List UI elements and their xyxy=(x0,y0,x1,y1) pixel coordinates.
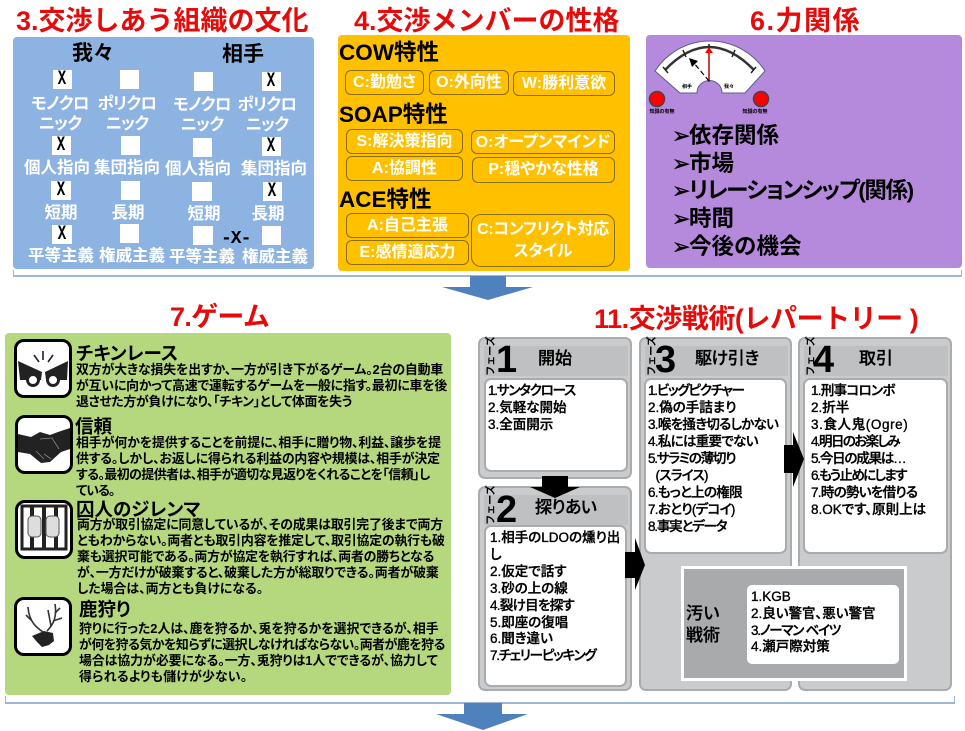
list: 5.今日の成果は… xyxy=(811,451,905,466)
row 4 checkboxes and labels: -X- xyxy=(221,229,250,249)
gauge: power meter: 相手 xyxy=(682,83,692,90)
pills: ACE: E:感情適応力 xyxy=(359,244,456,261)
row 2 checkboxes and labels xyxy=(24,134,307,178)
list: 3.砂の上の線 xyxy=(490,581,568,596)
list: power factors xyxy=(672,123,913,260)
list: dirty tactics: 2.良い警官、悪い警官 xyxy=(751,606,876,621)
panel: phase 2 probing xyxy=(478,486,632,691)
list: dirty tactics: 1.KGB xyxy=(751,589,791,604)
row 2 checkboxes and labels: 個人指向 xyxy=(165,160,231,178)
phase title: 取引 xyxy=(859,349,893,368)
list: dirty tactics xyxy=(747,585,899,664)
list: 6.もう止めにします xyxy=(811,468,906,483)
heading: ACE traits: ACE特性 xyxy=(339,187,432,212)
list xyxy=(644,378,787,554)
list: 8.事実とデータ xyxy=(648,519,726,534)
text: trust: 供する。しかし、お返しに得られる利益の内容や規模は、相手が決定 xyxy=(76,451,440,466)
row 4 checkboxes and labels: 権威主義 xyxy=(242,248,308,266)
row 2 checkboxes and labels: 集団指向 xyxy=(94,159,160,177)
text: prisoner's dilemma: 両方が取引協定に同意しているが、その成果は取引完了後まで両方 xyxy=(77,517,443,532)
pills: COW: O:外向性 xyxy=(436,74,502,91)
list: 1.ビッグピクチャー xyxy=(648,383,744,398)
heading: counterpart: 相手 xyxy=(222,43,264,66)
phase number: 4 xyxy=(813,339,834,381)
list: 3.全面開示 xyxy=(488,417,553,432)
title: 6 power relations: 6.力関係 xyxy=(750,6,861,36)
heading: dirty tactics: 汚い xyxy=(686,604,720,623)
panel: phase 1 opening xyxy=(478,337,632,479)
list: 2.気軽な開始 xyxy=(488,400,567,415)
row 4 checkboxes and labels: X xyxy=(58,223,66,246)
panel: phase 4 closing xyxy=(798,337,952,691)
text: trust xyxy=(76,435,441,498)
phase label: フェーズ xyxy=(647,336,658,376)
list: 4.私には重要でない xyxy=(648,434,758,449)
pills: COW: C:勤勉さ xyxy=(353,74,416,91)
panel: games xyxy=(5,333,451,695)
list xyxy=(803,378,948,554)
list: power factors: 市場 xyxy=(689,151,734,176)
heading: stag hunt: 鹿狩り xyxy=(79,599,131,620)
list: power factors: ➢ xyxy=(672,124,690,149)
list xyxy=(484,378,628,472)
icon: prison bars xyxy=(15,500,73,559)
gauge: power meter: 我々 xyxy=(724,83,734,90)
text: prisoner's dilemma: ともわからない。両者とも取引内容を推定して、取引協定の執行も破 xyxy=(77,533,445,548)
row 3 checkboxes and labels: 短期 xyxy=(188,205,220,223)
row 2 checkboxes and labels: X xyxy=(267,135,276,158)
header band xyxy=(804,346,948,376)
row 1 checkboxes and labels: ニック xyxy=(246,116,288,134)
arrow: down top row xyxy=(442,276,533,300)
row 1 checkboxes and labels: ニック xyxy=(106,115,148,133)
phase title: 探りあい xyxy=(535,498,596,517)
row 2 checkboxes and labels: X xyxy=(57,134,66,157)
list: 8.OKです、原則上は xyxy=(811,502,926,517)
list: dirty tactics: 3.ノーマン ベイツ xyxy=(751,623,840,638)
panel: organizational culture xyxy=(13,37,314,269)
pills: ACE: A:自己主張 xyxy=(367,217,448,234)
list: 1.刑事コロンボ xyxy=(811,383,895,398)
row 1 checkboxes and labels: ポリクロ xyxy=(237,96,297,114)
icon: handshake xyxy=(15,415,73,474)
title: 11 negotiation tactics: 11.交渉戦術(レパートリー ) xyxy=(594,304,918,334)
phase number: 3 xyxy=(655,339,676,381)
list: 7.チェリーピッキング xyxy=(490,648,595,663)
panel: power relations xyxy=(646,35,962,268)
list: 6.もっと上の権限 xyxy=(648,485,742,500)
arrow: phase 3 to 4 xyxy=(784,432,804,487)
row 2 checkboxes and labels: 個人指向 xyxy=(24,159,90,177)
list: dirty tactics: 4.瀬戸際対策 xyxy=(751,639,830,654)
pills: SOAP: S:解決策指向 xyxy=(356,133,452,150)
text: stag hunt: 場合は協力が必要になる。一方、兎狩りは1人でできるが、協力して xyxy=(79,653,438,668)
title: 7 game: 7.ゲーム xyxy=(170,302,269,332)
panel: member personality xyxy=(338,35,630,271)
list: 1.サンタクロース xyxy=(488,383,575,398)
list: 3.食人鬼(Ogre) xyxy=(811,417,908,432)
row 1 checkboxes and labels: ポリクロ xyxy=(97,95,157,113)
heading: dirty tactics xyxy=(686,604,720,645)
list: 2.折半 xyxy=(811,400,849,415)
gauge: power meter xyxy=(648,40,770,115)
phase label: フェーズ xyxy=(806,336,817,376)
text: prisoner's dilemma: 棄も選択可能である。両方が協定を執行すれば、両者の勝ちとなる xyxy=(77,549,434,564)
list: 5.サラミの薄切り xyxy=(648,451,735,466)
pills: ACE: C:コンフリクト対応 xyxy=(477,221,609,238)
phase number: 1 xyxy=(496,339,517,381)
text: trust: する。最初の提供者は、相手が適切な見返りをくれることを「信頼」し xyxy=(76,467,430,482)
heading: COW traits: COW特性 xyxy=(339,40,439,65)
pills: SOAP: A:協調性 xyxy=(372,160,437,177)
panel: dirty tactics xyxy=(681,566,907,681)
list: 3.喉を掻き切るしかない xyxy=(648,417,778,432)
bracket line: top row xyxy=(13,270,962,277)
row 1 checkboxes and labels: X xyxy=(58,68,67,91)
list: 1.相手のLDOの燻り出 xyxy=(490,530,620,545)
text: chicken race: 退させた方が負けになり、「チキン」として体面を失う xyxy=(76,394,352,409)
header band xyxy=(484,495,628,525)
row 3 checkboxes and labels: X xyxy=(268,180,277,203)
header band xyxy=(645,346,788,376)
pills: SOAP xyxy=(346,129,615,183)
heading: chicken race: チキンレース xyxy=(76,343,178,364)
heading: prisoner's dilemma: 囚人のジレンマ xyxy=(76,499,201,520)
list: power factors: 時間 xyxy=(689,206,734,231)
list: power factors: ➢ xyxy=(672,235,690,260)
list: power factors: ➢ xyxy=(672,179,690,204)
heading: us: 我々 xyxy=(72,42,114,65)
text: chicken race: が互いに向かって高速で運転するゲームを一般に指す。最初に車を後 xyxy=(76,378,447,393)
list: 6.聞き違い xyxy=(490,631,553,646)
arrow: down bottom row xyxy=(436,703,528,730)
text: prisoner's dilemma xyxy=(77,517,445,596)
gauge: power meter: 知識の有無 xyxy=(649,108,675,115)
text: chicken race: 双方が大きな損失を出すか、一方が引き下がるゲーム。2台の自動車 xyxy=(76,362,443,377)
list: 5.即座の復唱 xyxy=(490,615,568,630)
pills: ACE: スタイル xyxy=(514,243,572,260)
gauge: power meter: 知識の有無 xyxy=(742,108,768,115)
title: 4 member personality: 4.交渉メンバーの性格 xyxy=(354,6,620,36)
list: 7.おとり(デコイ) xyxy=(648,502,735,517)
phase title: 駆け引き xyxy=(695,349,759,368)
list: power factors: リレーションシップ(関係) xyxy=(689,178,913,203)
text: stag hunt: が何を狩る気かを知らずに選択しなければならない。両者が鹿を狩る xyxy=(79,637,445,652)
row 3 checkboxes and labels xyxy=(44,179,284,223)
row 3 checkboxes and labels: 長期 xyxy=(252,205,284,223)
row 1 checkboxes and labels xyxy=(31,68,297,134)
list: 2.仮定で話す xyxy=(490,564,566,579)
row 4 checkboxes and labels: 権威主義 xyxy=(99,247,165,265)
row 4 checkboxes and labels: 平等主義 xyxy=(169,248,235,266)
text: stag hunt: 狩りに行った2人は、鹿を狩るか、兎を狩るかを選択できるが、相手 xyxy=(79,621,439,636)
list: 7.時の勢いを借りる xyxy=(811,485,917,500)
text: prisoner's dilemma: した場合は、両方とも負けになる。 xyxy=(77,581,263,596)
row 1 checkboxes and labels: ニック xyxy=(181,116,223,134)
phase label: フェーズ xyxy=(486,336,497,376)
row 4 checkboxes and labels: 平等主義 xyxy=(28,247,94,265)
pills: SOAP: O:オープンマインド xyxy=(476,134,610,151)
list: power factors: ➢ xyxy=(672,207,690,232)
title: 3 organizational culture: 3.交渉しあう組織の文化 xyxy=(16,6,309,36)
row 1 checkboxes and labels: モノクロ xyxy=(173,96,231,114)
row 3 checkboxes and labels: X xyxy=(57,179,65,202)
arrow: phase 2 to 3 xyxy=(625,538,645,590)
list: (スライス) xyxy=(656,468,708,483)
text: stag hunt xyxy=(79,621,445,684)
text: prisoner's dilemma: が、一方だけが破棄すると、破棄した方が総取りできる。両者が破棄 xyxy=(77,565,439,580)
row 1 checkboxes and labels: ニック xyxy=(39,115,81,133)
list: 2.偽の手詰まり xyxy=(648,400,736,415)
text: trust: ている。 xyxy=(76,483,114,498)
arrow: phase 1 to 2 xyxy=(530,476,580,498)
list: し xyxy=(490,547,501,562)
heading: dirty tactics: 戦術 xyxy=(686,626,720,645)
row 1 checkboxes and labels: モノクロ xyxy=(31,95,89,113)
list: 4.裂け目を探す xyxy=(490,598,574,613)
text: trust: 相手が何かを提供することを前提に、相手に贈り物、利益、譲歩を提 xyxy=(76,435,441,450)
panel: phase 3 bargaining xyxy=(639,337,792,691)
pills: ACE xyxy=(346,213,615,267)
pills: COW xyxy=(345,70,615,96)
row 1 checkboxes and labels: X xyxy=(267,70,276,93)
phase number: 2 xyxy=(496,489,517,531)
phase label: フェーズ xyxy=(486,485,497,525)
heading: SOAP traits: SOAP特性 xyxy=(339,102,448,127)
row 3 checkboxes and labels: 長期 xyxy=(112,204,144,222)
list: 4.明日のお楽しみ xyxy=(811,434,899,449)
text: chicken race xyxy=(76,362,447,409)
row 3 checkboxes and labels: 短期 xyxy=(44,204,78,222)
icon: deer xyxy=(14,597,72,656)
row 2 checkboxes and labels: 集団指向 xyxy=(241,160,307,178)
bracket line: bottom row xyxy=(5,696,955,704)
phase title: 開始 xyxy=(538,349,572,368)
icon: car crash xyxy=(14,339,72,398)
header band xyxy=(484,346,628,376)
list xyxy=(484,525,627,687)
pills: COW: W:勝利意欲 xyxy=(522,75,606,92)
list: power factors: ➢ xyxy=(672,152,690,177)
text: stag hunt: 得られるよりも儲けが少ない。 xyxy=(79,669,247,684)
pills: SOAP: P:穏やかな性格 xyxy=(488,161,599,178)
row 4 checkboxes and labels xyxy=(28,223,308,266)
list: power factors: 今後の機会 xyxy=(689,234,802,259)
heading: trust: 信頼 xyxy=(75,416,112,437)
list: power factors: 依存関係 xyxy=(689,123,779,148)
